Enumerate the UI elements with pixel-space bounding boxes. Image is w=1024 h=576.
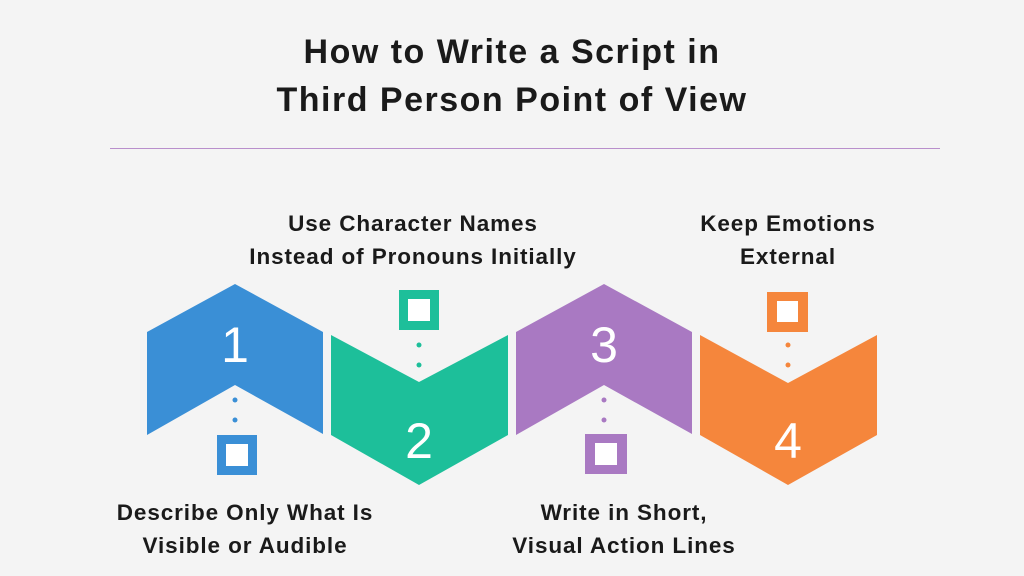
label 3: Write in Short, [541,500,707,525]
label 4: Keep Emotions [700,211,876,236]
label 4 [700,211,876,269]
label 1 [117,500,373,558]
label 2 [249,211,577,269]
label 1: Describe Only What Is [117,500,373,525]
label 2: Instead of Pronouns Initially [249,244,577,269]
label 2: Use Character Names [288,211,538,236]
step 1 blue: 1 [221,317,249,373]
label 1: Visible or Audible [142,533,348,558]
step 4 orange [700,292,877,485]
step 3 purple: 3 [590,317,618,373]
title: How to Write a Script in [304,33,720,71]
label 3: Visual Action Lines [512,533,736,558]
step 2 green [331,290,508,485]
step 2 green: 2 [405,413,433,469]
step 3 purple [516,284,692,474]
label 4: External [740,244,836,269]
title [276,33,747,119]
divider [110,148,940,149]
label 3 [512,500,736,558]
step 4 orange: 4 [774,413,802,469]
title: Third Person Point of View [276,81,747,119]
step 1 blue [147,284,323,475]
